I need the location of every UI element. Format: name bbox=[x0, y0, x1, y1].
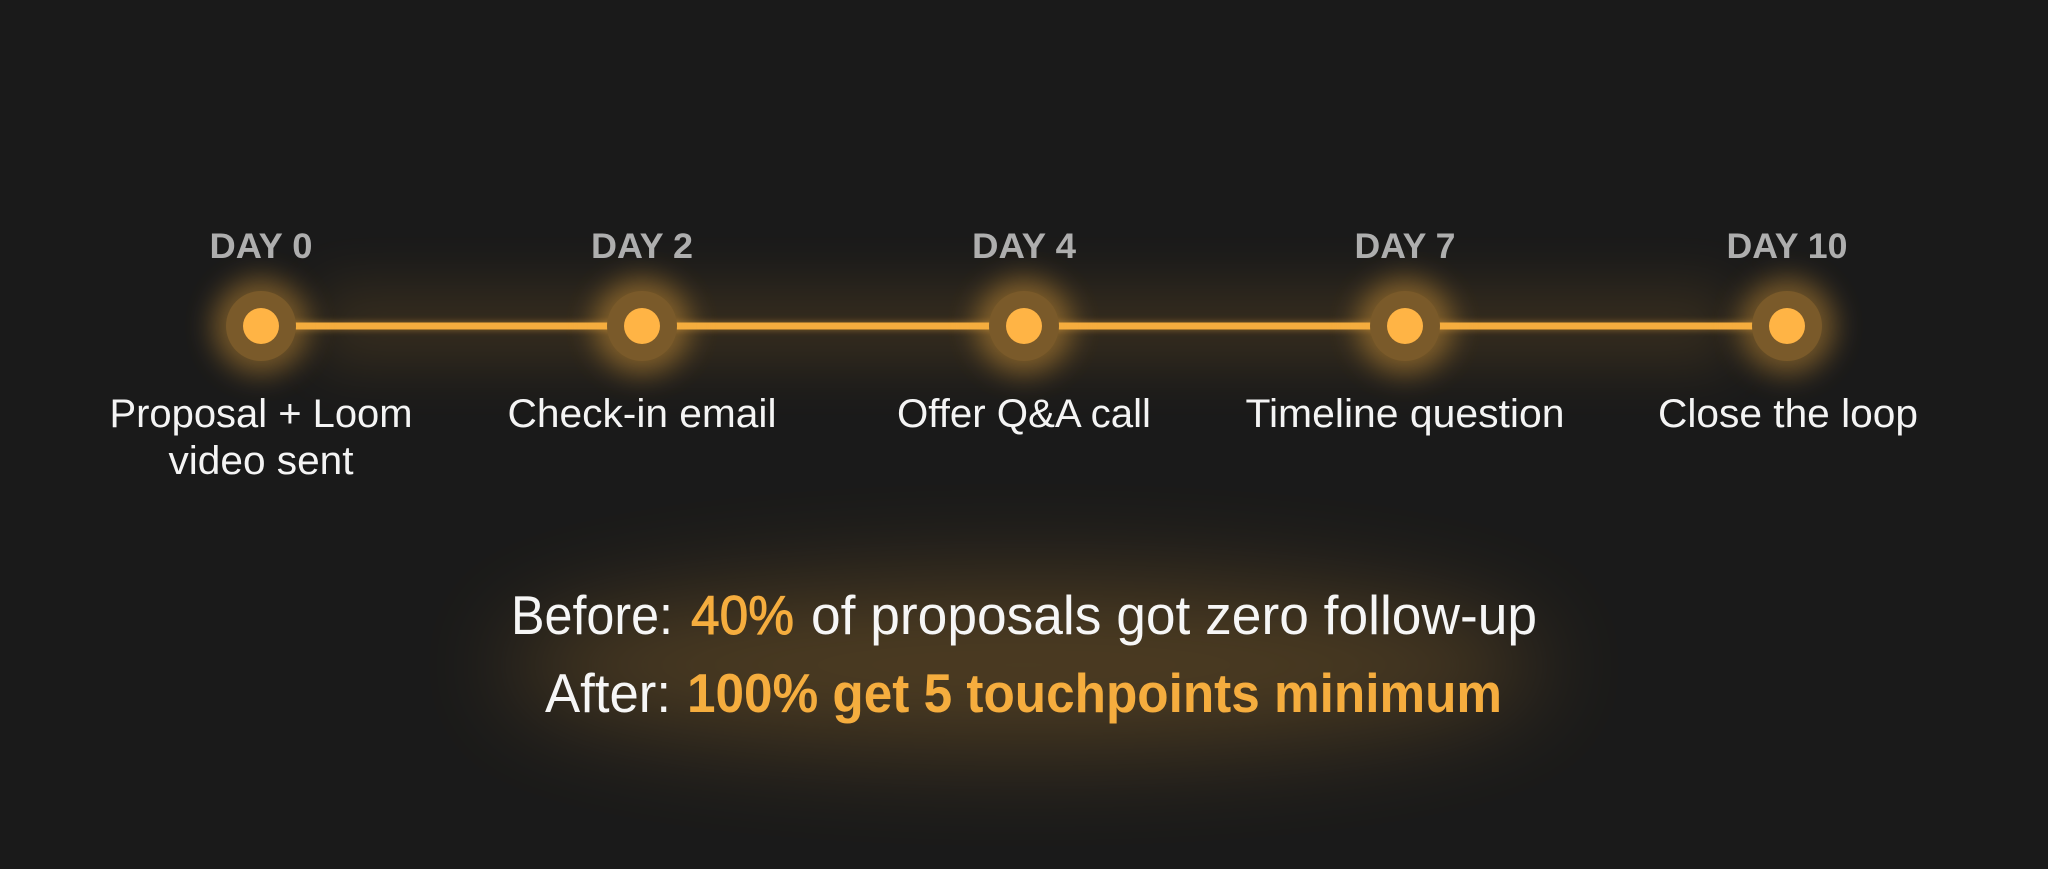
summary bbox=[511, 584, 1537, 724]
node: day 0 bbox=[213, 278, 309, 374]
step: proposal and video: Proposal + Loom bbox=[110, 392, 412, 436]
step descriptions bbox=[110, 392, 1918, 483]
after line: After: bbox=[545, 662, 671, 724]
step: close the loop: Close the loop bbox=[1658, 392, 1918, 436]
node: day 2 bbox=[594, 278, 690, 374]
step: proposal and video bbox=[110, 392, 412, 483]
label: day 7: DAY 7 bbox=[1354, 227, 1456, 266]
label: day 10: DAY 10 bbox=[1726, 227, 1848, 266]
label: day 4: DAY 4 bbox=[972, 227, 1077, 266]
step: timeline question: Timeline question bbox=[1246, 392, 1564, 436]
label: day 0: DAY 0 bbox=[210, 227, 312, 266]
step: proposal and video: video sent bbox=[168, 439, 354, 483]
timeline bbox=[213, 278, 1835, 374]
after line: 100% get 5 touchpoints minimum bbox=[687, 662, 1502, 724]
connector line bbox=[261, 322, 1787, 330]
timeline line glow bbox=[290, 286, 1760, 366]
label: day 2: DAY 2 bbox=[591, 227, 693, 266]
before line: of proposals got zero follow-up bbox=[811, 584, 1537, 646]
node: day 7 bbox=[1357, 278, 1453, 374]
node: day 10 bbox=[1739, 278, 1835, 374]
step: check-in email: Check-in email bbox=[508, 392, 776, 436]
node: day 4 bbox=[976, 278, 1072, 374]
before line bbox=[511, 584, 1537, 646]
before line: 40% bbox=[691, 584, 794, 646]
summary glow bbox=[504, 580, 1544, 750]
before line: Before: bbox=[511, 584, 673, 646]
step: offer call: Offer Q&A call bbox=[897, 392, 1151, 436]
day labels bbox=[210, 227, 1848, 266]
